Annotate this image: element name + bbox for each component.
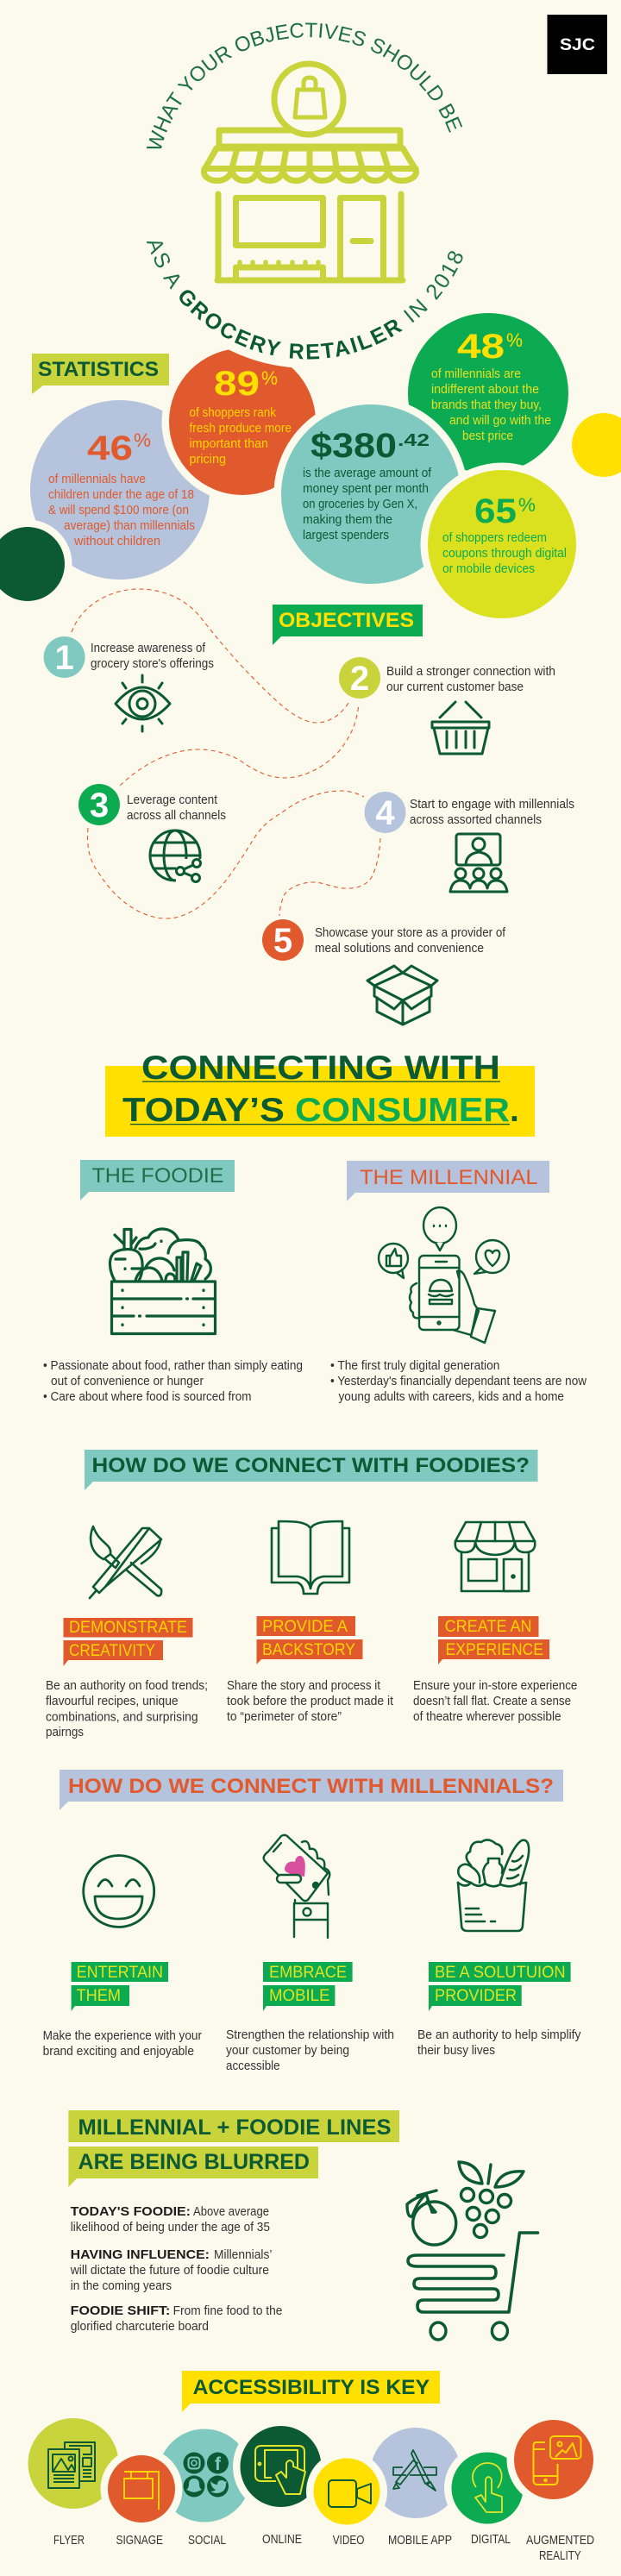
heading: connecting with today's consumer: CONSUMER: [295, 1092, 510, 1129]
text: embrace copy: [226, 2028, 394, 2073]
icon: small store: [455, 1522, 535, 1591]
text: 380.42 dollars stat: [303, 427, 432, 542]
label: be a solutuion provider: BE A SOLUTUION: [435, 1964, 566, 1982]
blob: video: [314, 2458, 380, 2525]
logo: SJC: SJC: [560, 36, 595, 54]
panel: entertain them: [43, 1856, 202, 2059]
objective 1: grocery store's offerings: [91, 657, 214, 671]
text: 89 percent stat: %: [261, 367, 278, 389]
icon: shopping cart with fruit: [407, 2162, 538, 2340]
heading: the foodie: [80, 1160, 235, 1200]
text: embrace copy: accessible: [226, 2059, 280, 2073]
heading: how do we connect with foodies: [85, 1450, 538, 1490]
blob: augmented reality: [514, 2420, 593, 2499]
text: blurred lines copy: will dictate the future of foodie culture: [70, 2264, 269, 2278]
text: blurred lines copy: From fine food to the: [173, 2304, 282, 2318]
objective 2: our current customer base: [386, 680, 524, 694]
objective 3: Leverage content: [127, 793, 217, 807]
text: 65 percent stat: of shoppers redeem: [442, 531, 547, 545]
label: be a solutuion provider: PROVIDER: [435, 1987, 517, 2005]
icon: augmented reality phone: [533, 2436, 581, 2485]
icon: app store: [393, 2450, 436, 2491]
heading: the millennial: [347, 1161, 549, 1201]
text: 48 percent stat: best price: [462, 429, 513, 443]
icon: hand holding phone with heart: [264, 1835, 329, 1938]
text: creativity copy: flavourful recipes, unique: [46, 1695, 179, 1708]
label: embrace mobile: [263, 1962, 353, 2011]
text: channel labels: ONLINE: [262, 2532, 302, 2547]
objective 5: 5: [273, 922, 292, 960]
icon: eye: [116, 675, 170, 731]
label: be a solutuion provider: [429, 1962, 571, 2011]
text: blurred lines copy: TODAY'S FOODIE:: [71, 2204, 191, 2219]
blob: online: [240, 2426, 321, 2507]
title: [147, 22, 462, 360]
panel: the foodie: [43, 1160, 303, 1404]
objective 1: [44, 636, 214, 731]
text: 48 percent stat: %: [506, 329, 523, 351]
blob: dark green accent: [0, 527, 65, 601]
text: 46 percent stat: without children: [73, 535, 160, 548]
heading: connecting with today's consumer: CONNECTING WITH: [141, 1050, 500, 1087]
text: 65 percent stat: %: [518, 494, 536, 516]
panel: embrace mobile: [226, 1835, 394, 2073]
panel: create an experience: [413, 1522, 577, 1724]
label: entertain them: ENTERTAIN: [77, 1964, 163, 1982]
text: millennial bullets: • The first truly digital generation: [330, 1359, 499, 1373]
text: solution copy: their busy lives: [417, 2044, 495, 2058]
label: demonstrate creativity: [64, 1618, 193, 1666]
text: 46 percent stat: [48, 429, 195, 548]
text: solution copy: Be an authority to help simplify: [417, 2028, 581, 2042]
heading: statistics: [32, 354, 169, 394]
icon: signage: [124, 2472, 159, 2510]
icon: social networks: f: [215, 2454, 222, 2474]
text: experience copy: [413, 1679, 577, 1724]
icon: tablet with hand: [255, 2446, 305, 2494]
objective 2: Build a stronger connection with: [386, 665, 555, 679]
panel: demonstrate creativity: [46, 1526, 208, 1739]
text: foodie bullets: • Care about where food is sourced from: [43, 1390, 252, 1404]
text: entertain copy: [43, 2029, 202, 2059]
text: 65 percent stat: or mobile devices: [442, 562, 535, 576]
text: 89 percent stat: fresh produce more: [190, 422, 292, 436]
blob: yellow accent: [572, 413, 621, 477]
text: channel labels: VIDEO: [333, 2533, 364, 2548]
text: 380.42 dollars stat: .42: [398, 431, 430, 450]
icon: phone with social bubbles: [379, 1207, 509, 1343]
panel: statistics blobs: [0, 11, 621, 618]
heading: the millennial: THE MILLENNIAL: [360, 1166, 538, 1189]
text: blurred lines copy: glorified charcuterie board: [71, 2320, 209, 2334]
text: 65 percent stat: [442, 492, 567, 576]
text: 65 percent stat: coupons through digital: [442, 547, 567, 561]
heading: how do we connect with foodies: HOW DO WE CONNECT WITH FOODIES?: [91, 1454, 530, 1477]
icon: grocery bag: [458, 1840, 529, 1931]
icon: vegetable crate: [110, 1229, 216, 1333]
text: embrace copy: Strengthen the relationship with: [226, 2028, 394, 2042]
blob: 380.42 dollars: [281, 404, 461, 584]
text: 48 percent stat: [431, 328, 551, 443]
text: blurred lines copy: FOODIE SHIFT:: [71, 2303, 170, 2318]
text: blurred lines copy: Above average: [193, 2205, 269, 2219]
text: 89 percent stat: important than: [190, 437, 268, 451]
label: create an experience: CREATE AN: [445, 1618, 532, 1636]
text: foodie bullets: [43, 1359, 303, 1404]
text: channel labels: SOCIAL: [188, 2533, 226, 2548]
objective 5: Showcase your store as a provider of: [315, 926, 506, 940]
panel: be a solution provider: [417, 1840, 581, 2058]
text: blurred lines copy: in the coming years: [71, 2279, 172, 2293]
heading: connecting with today's consumer: TODAY’S: [122, 1092, 285, 1129]
text: 89 percent stat: pricing: [190, 453, 226, 467]
heading: objectives: OBJECTIVES: [279, 609, 414, 632]
label: provide a backstory: [257, 1616, 362, 1664]
text: 48 percent stat: 48: [457, 328, 505, 366]
objective 2: [339, 657, 555, 754]
text: 380.42 dollars stat: on groceries by Gen X,: [303, 498, 417, 511]
heading: objectives: [273, 605, 423, 645]
text: 46 percent stat: of millennials have: [48, 473, 146, 486]
text: solution copy: [417, 2028, 581, 2058]
label: entertain them: [72, 1962, 168, 2011]
title: WHAT YOUR OBJECTIVES SHOULD BE: [147, 22, 462, 148]
arrow: dashed route between objectives: [72, 589, 380, 918]
text: 48 percent stat: and will go with the: [449, 414, 551, 428]
icon: smiley: [84, 1856, 154, 1927]
label: demonstrate creativity: DEMONSTRATE: [69, 1619, 187, 1637]
heading: how do we connect with millennials: [60, 1770, 563, 1810]
text: creativity copy: combinations, and surprising: [46, 1711, 198, 1725]
text: 89 percent stat: of shoppers rank: [190, 406, 277, 420]
blob: 48 percent: [408, 313, 568, 473]
blob: 89 percent: [169, 348, 316, 495]
text: 89 percent stat: 89: [214, 365, 260, 403]
objective 5: [262, 919, 506, 1025]
objective 3: [78, 784, 226, 882]
text: backstory copy: Share the story and process it: [227, 1679, 380, 1693]
text: experience copy: doesn’t fall flat. Create a sense: [413, 1695, 571, 1708]
label: create an experience: EXPERIENCE: [445, 1641, 543, 1659]
objective 3: 3: [90, 787, 109, 824]
text: foodie bullets: • Passionate about food, rather than simply eating: [43, 1359, 303, 1373]
text: embrace copy: your customer by being: [226, 2044, 349, 2058]
heading: connecting with today's consumer: .: [510, 1092, 519, 1129]
text: 380.42 dollars stat: making them the: [303, 513, 392, 527]
panel: accessibility channels: [28, 2418, 594, 2563]
text: backstory copy: took before the product made it: [227, 1695, 393, 1708]
label: create an experience: [438, 1616, 549, 1664]
title: AS A GROCERY RETAILER IN 2018: [147, 241, 462, 360]
text: entertain copy: brand exciting and enjoyable: [43, 2045, 194, 2059]
icon: digital touch: [473, 2463, 502, 2512]
objective 4: Start to engage with millennials: [410, 798, 574, 812]
text: 380.42 dollars stat: $380: [310, 427, 397, 465]
label: entertain them: THEM: [77, 1987, 121, 2005]
text: channel labels: AUGMENTED: [526, 2533, 594, 2548]
text: millennial bullets: young adults with careers, kids and a home: [338, 1390, 564, 1404]
blob: 46 percent: [30, 400, 210, 580]
text: 46 percent stat: %: [134, 429, 151, 451]
panel: the millennial: [330, 1161, 586, 1404]
icon: presenter and audience: [450, 834, 507, 892]
heading: statistics: STATISTICS: [38, 358, 159, 381]
text: 89 percent stat: [190, 365, 292, 467]
blob: signage: [108, 2455, 175, 2523]
label: embrace mobile: EMBRACE: [269, 1964, 347, 1982]
text: millennial bullets: • Yesterday's financially dependant teens are now: [330, 1375, 586, 1388]
text: 380.42 dollars stat: money spent per month: [303, 482, 429, 496]
text: 380.42 dollars stat: largest spenders: [303, 529, 389, 542]
objective 3: across all channels: [127, 809, 226, 823]
objective 4: [364, 792, 574, 892]
heading: millennial + foodie lines are being blurred: MILLENNIAL + FOODIE LINES: [78, 2115, 392, 2140]
text: 380.42 dollars stat: is the average amount of: [303, 467, 432, 480]
text: blurred lines copy: Millennials’: [214, 2248, 272, 2262]
objective 5: meal solutions and convenience: [315, 942, 484, 956]
text: 46 percent stat: children under the age of 18: [48, 488, 194, 502]
text: 46 percent stat: & will spend $100 more (on: [48, 504, 189, 517]
heading: millennial + foodie lines are being blurred: [68, 2110, 399, 2187]
text: experience copy: Ensure your in-store experience: [413, 1679, 577, 1693]
icon: open book: [272, 1521, 349, 1594]
objective 4: across assorted channels: [410, 813, 542, 827]
text: channel labels: DIGITAL: [471, 2532, 511, 2547]
text: creativity copy: [46, 1679, 208, 1739]
icon: storefront: [204, 64, 417, 280]
icon: globe with share: [150, 830, 202, 882]
objective 1: 1: [54, 639, 74, 677]
blob: digital: [452, 2453, 523, 2523]
text: 65 percent stat: 65: [474, 492, 517, 530]
text: 46 percent stat: average) than millennials: [64, 519, 195, 533]
heading: millennial + foodie lines are being blurred: ARE BEING BLURRED: [78, 2150, 310, 2174]
text: channel labels: SIGNAGE: [116, 2533, 163, 2548]
panel: provide a backstory: [227, 1521, 393, 1724]
text: creativity copy: pairngs: [46, 1726, 84, 1739]
label: provide a backstory: PROVIDE A: [262, 1618, 348, 1636]
text: experience copy: of theatre wherever possible: [413, 1710, 561, 1724]
icon: open box: [367, 966, 437, 1025]
blob: flyer: [28, 2418, 119, 2509]
label: embrace mobile: MOBILE: [269, 1987, 329, 2005]
text: blurred lines copy: HAVING INFLUENCE:: [71, 2247, 210, 2262]
heading: the foodie: THE FOODIE: [91, 1164, 224, 1188]
icon: brush and pen: [90, 1526, 161, 1598]
heading: accessibility is key: ACCESSIBILITY IS KEY: [193, 2376, 430, 2399]
icon: social networks: [183, 2453, 229, 2498]
text: channel labels: FLYER: [53, 2533, 85, 2548]
objective 2: 2: [350, 660, 369, 698]
heading: accessibility is key: [182, 2371, 440, 2412]
objective 1: Increase awareness of: [91, 642, 206, 655]
text: blurred lines copy: likelihood of being under the age of 35: [71, 2221, 270, 2234]
text: 46 percent stat: 46: [87, 429, 133, 467]
logo: SJC: [547, 15, 607, 74]
icon: flyer: [48, 2442, 95, 2488]
label: provide a backstory: BACKSTORY: [262, 1641, 355, 1659]
heading: connecting with today's consumer: [105, 1050, 535, 1137]
text: entertain copy: Make the experience with your: [43, 2029, 202, 2043]
blob: 65 percent: [428, 470, 576, 618]
text: blurred lines copy: [70, 2204, 282, 2334]
icon: video camera: [329, 2480, 371, 2507]
icon: basket: [432, 702, 489, 754]
text: 48 percent stat: of millennials are: [431, 367, 521, 381]
text: foodie bullets: out of convenience or hunger: [51, 1375, 204, 1388]
text: backstory copy: [227, 1679, 393, 1724]
label: demonstrate creativity: CREATIVITY: [69, 1642, 155, 1660]
blob: mobile app: [371, 2428, 461, 2518]
objective 4: 4: [375, 794, 395, 832]
text: creativity copy: Be an authority on food trends;: [46, 1679, 208, 1693]
text: backstory copy: to “perimeter of store”: [227, 1710, 342, 1724]
text: channel labels: [53, 2532, 594, 2563]
text: channel labels: REALITY: [539, 2548, 581, 2563]
heading: how do we connect with millennials: HOW DO WE CONNECT WITH MILLENNIALS?: [68, 1775, 554, 1798]
blob: social: [158, 2429, 251, 2522]
text: 48 percent stat: brands that they buy,: [431, 398, 542, 412]
text: 48 percent stat: indifferent about the: [431, 383, 539, 397]
text: millennial bullets: [330, 1359, 586, 1404]
text: channel labels: MOBILE APP: [388, 2533, 452, 2548]
